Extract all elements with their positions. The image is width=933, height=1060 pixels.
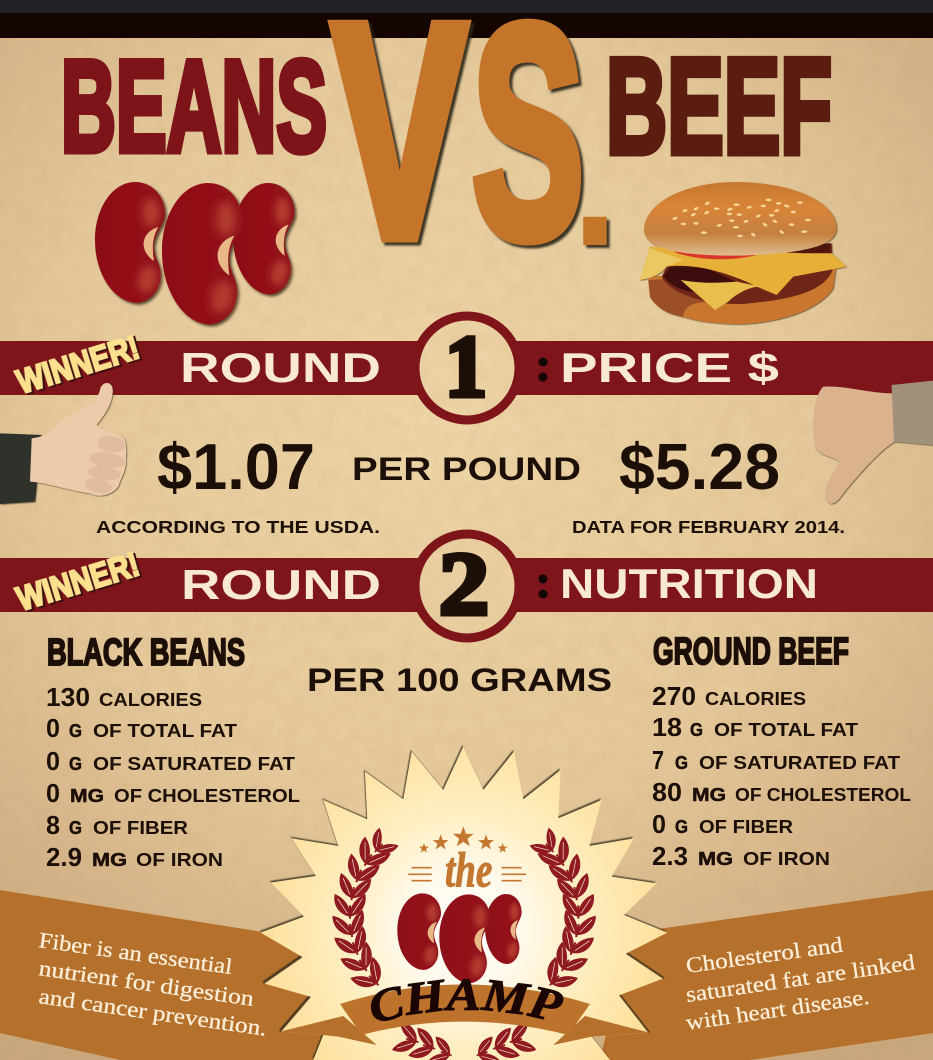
badge: the champ starburst: CHAMP — [370, 979, 564, 1022]
banner: round 2 nutrition: 2 — [439, 535, 489, 634]
badge: winner round 1: WINNER! — [12, 328, 144, 402]
column: black beans nutrition: CALORIES — [99, 690, 202, 710]
panel: right ribbon cholesterol note: with heart disease. — [684, 984, 871, 1035]
banner: round 2 nutrition: NUTRITION — [560, 560, 818, 607]
badge: the champ starburst — [260, 744, 668, 1060]
column: black beans nutrition: OF CHOLESTEROL — [114, 786, 300, 806]
badge: the champ starburst: the — [445, 842, 492, 898]
banner: round 1 price — [0, 316, 933, 420]
icon: hamburger — [640, 182, 847, 324]
column: ground beef nutrition: OF TOTAL FAT — [714, 720, 858, 740]
panel: right ribbon cholesterol note: saturated fat are linked — [684, 949, 916, 1007]
column: black beans nutrition: 130 — [46, 682, 90, 712]
icon: thumbs up hand — [0, 383, 127, 504]
column: ground beef nutrition: GROUND BEEF — [653, 631, 849, 673]
banner: round 1 price: 1 — [445, 319, 487, 416]
column: black beans nutrition: G — [69, 721, 82, 741]
column: black beans nutrition: OF IRON — [136, 850, 223, 870]
column: black beans nutrition: 2.9 — [46, 842, 82, 872]
top dark bars — [0, 0, 933, 38]
column: ground beef nutrition: 270 — [652, 681, 696, 711]
banner: round 1 price: ROUND — [180, 344, 381, 391]
source note: date: DATA FOR FEBRUARY 2014. — [572, 517, 845, 537]
column: ground beef nutrition: 0 — [652, 809, 666, 839]
column: black beans nutrition: 0 — [46, 746, 60, 776]
price: beef: $5.28 — [619, 430, 780, 503]
column: black beans nutrition: MG — [92, 850, 127, 870]
source note: usda: ACCORDING TO THE USDA. — [96, 517, 380, 537]
column: ground beef nutrition — [652, 631, 911, 871]
heading: vs: . — [572, 74, 618, 286]
column: ground beef nutrition: MG — [692, 785, 726, 805]
column: ground beef nutrition: OF CHOLESTEROL — [735, 785, 911, 805]
badge: winner round 2: WINNER! — [12, 545, 144, 619]
column: ground beef nutrition: OF FIBER — [699, 817, 793, 837]
column: ground beef nutrition: OF SATURATED FAT — [699, 753, 900, 773]
column: ground beef nutrition: OF IRON — [743, 849, 830, 869]
column: ground beef nutrition: G — [675, 753, 688, 773]
price: beans: $1.07 — [157, 430, 315, 503]
column: black beans nutrition — [46, 632, 300, 872]
column: ground beef nutrition: CALORIES — [705, 689, 806, 709]
column: black beans nutrition: OF SATURATED FAT — [93, 754, 295, 774]
column: black beans nutrition: G — [69, 818, 82, 838]
icon: thumbs down hand — [813, 381, 933, 504]
column: ground beef nutrition: MG — [698, 849, 733, 869]
column: black beans nutrition: 0 — [46, 713, 60, 743]
banner: round 1 price: PRICE $ — [560, 344, 779, 391]
column: ground beef nutrition: 7 — [652, 745, 664, 775]
column: black beans nutrition: OF TOTAL FAT — [93, 721, 237, 741]
column: black beans nutrition: G — [69, 754, 82, 774]
column: ground beef nutrition: G — [690, 720, 703, 740]
label: per pound: PER POUND — [352, 451, 581, 487]
column: black beans nutrition: 0 — [46, 778, 60, 808]
column: ground beef nutrition: 80 — [652, 777, 682, 807]
banner: round 2 nutrition — [0, 534, 933, 638]
panel: left ribbon fiber note: Fiber is an essential — [37, 927, 234, 979]
column: ground beef nutrition: 18 — [652, 712, 682, 742]
column: black beans nutrition: MG — [70, 786, 104, 806]
icon: three kidney beans — [95, 182, 295, 325]
column: ground beef nutrition: G — [675, 817, 688, 837]
panel: left ribbon fiber note: and cancer prevention. — [37, 983, 269, 1041]
label: per 100 grams: PER 100 GRAMS — [307, 662, 612, 698]
panel: right ribbon cholesterol note — [600, 890, 933, 1060]
banner: round 2 nutrition: ROUND — [181, 561, 381, 608]
heading: beans: BEANS — [61, 33, 327, 179]
column: black beans nutrition: BLACK BEANS — [47, 632, 245, 674]
panel: right ribbon cholesterol note: Cholesterol and — [684, 932, 844, 978]
column: black beans nutrition: OF FIBER — [93, 818, 188, 838]
column: ground beef nutrition: 2.3 — [652, 841, 688, 871]
panel: left ribbon fiber note: nutrient for digestion — [37, 955, 256, 1011]
panel: left ribbon fiber note — [0, 890, 330, 1060]
column: black beans nutrition: 8 — [46, 810, 60, 840]
